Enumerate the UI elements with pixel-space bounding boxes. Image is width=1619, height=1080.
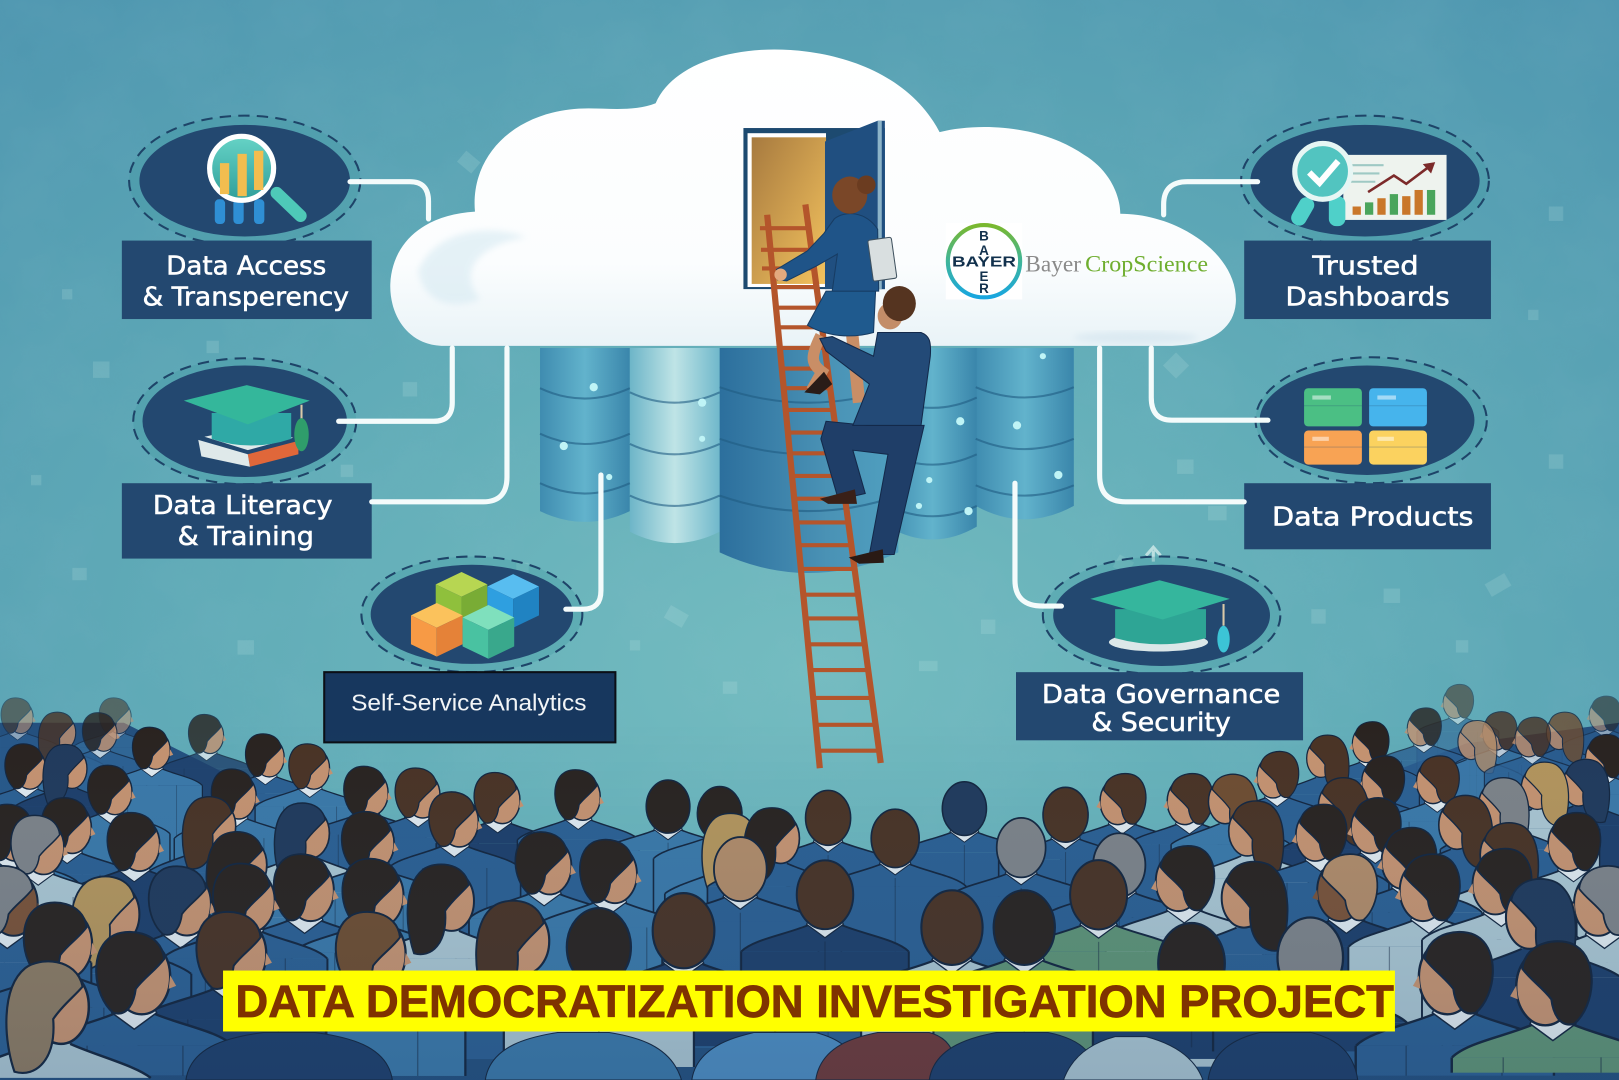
label: self-service analytics [324, 672, 615, 742]
label: data literacy and training: Data Literacy [153, 491, 332, 521]
door [743, 121, 885, 289]
logo: Bayer CropScience: A [979, 243, 989, 258]
logo: Bayer CropScience [946, 223, 1208, 299]
logo: Bayer CropScience: BAYER [952, 254, 1017, 270]
title banner: DATA DEMOCRATIZATION INVESTIGATION PROJECT [235, 976, 1394, 1027]
figure: man climbing [820, 286, 931, 564]
label: trusted dashboards: Dashboards [1285, 283, 1450, 313]
logo: Bayer CropScience: B [979, 229, 989, 244]
database cylinders [540, 348, 1074, 573]
label: data governance and security: & Security [1091, 708, 1231, 738]
icon circle: trusted dashboards [1241, 116, 1489, 246]
icon circle: data products [1256, 357, 1487, 483]
logo: Bayer CropScience: E [980, 269, 989, 284]
ladder [760, 204, 881, 768]
crowd of people looking up [0, 684, 1619, 1080]
label: trusted dashboards: Trusted [1311, 252, 1419, 282]
label: data governance and security [1016, 672, 1303, 740]
icon circle: data governance [1043, 557, 1280, 674]
label: data governance and security: Data Governance [1042, 680, 1280, 710]
label: trusted dashboards [1244, 241, 1491, 319]
label: data access and transparency: Data Access [166, 252, 326, 282]
label: data literacy and training [122, 483, 372, 559]
connector lines [339, 182, 1268, 609]
icon circle: data access [129, 116, 360, 246]
logo: Bayer CropScience: R [979, 281, 989, 296]
logo: Bayer CropScience: CropScience [1085, 252, 1208, 277]
label: data access and transparency: & Transperency [143, 283, 349, 313]
label: data access and transparency [122, 241, 372, 319]
icon circle: self-service analytics [361, 557, 582, 672]
label: data products: Data Products [1272, 503, 1473, 533]
label: self-service analytics: Self-Service Analytics [351, 689, 586, 715]
cloud [390, 50, 1236, 346]
arrow above governance icon [1146, 547, 1161, 562]
figure: woman climbing [774, 176, 897, 403]
label: data literacy and training: & Training [178, 522, 314, 552]
label: data products [1244, 483, 1491, 549]
logo: Bayer CropScience: Bayer [1025, 252, 1081, 277]
icon circle: data literacy [133, 358, 356, 484]
